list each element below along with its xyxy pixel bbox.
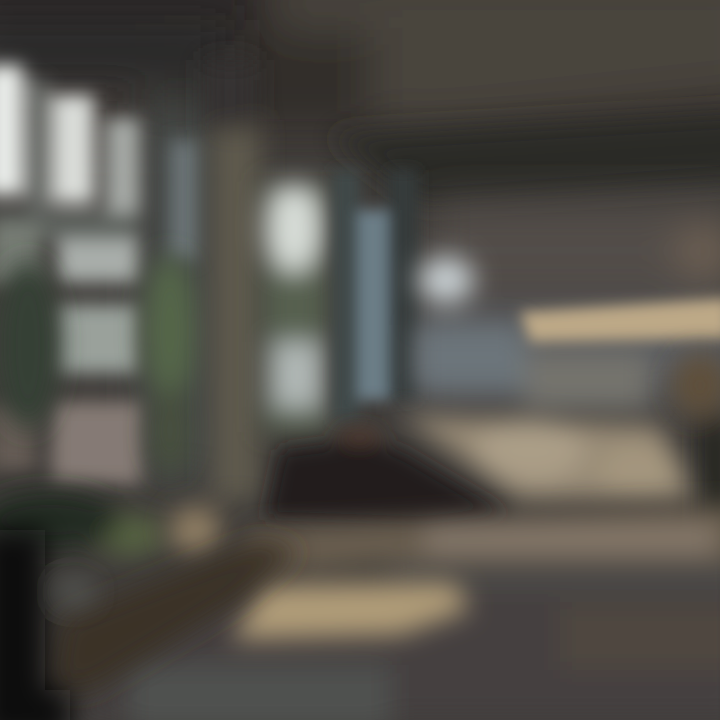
centre windows: [262, 182, 328, 432]
pillar left: [169, 60, 260, 554]
ceiling: [0, 0, 720, 140]
back wall: [410, 205, 720, 400]
sunlit floor patch: [232, 582, 470, 640]
dark foreground left: [0, 530, 95, 720]
centre columns: [333, 170, 418, 420]
lit floor: [400, 415, 695, 500]
wooden ledge left: [50, 540, 300, 690]
right side objects: [672, 353, 720, 540]
plants left: [0, 255, 196, 555]
left wall dark: [20, 52, 206, 443]
dark ceiling beam: [330, 110, 720, 205]
floor: [60, 505, 720, 720]
right window glow: [415, 256, 650, 407]
left window panes: [0, 65, 198, 484]
light shelf: [520, 298, 720, 342]
dark mound furniture: [265, 427, 510, 525]
